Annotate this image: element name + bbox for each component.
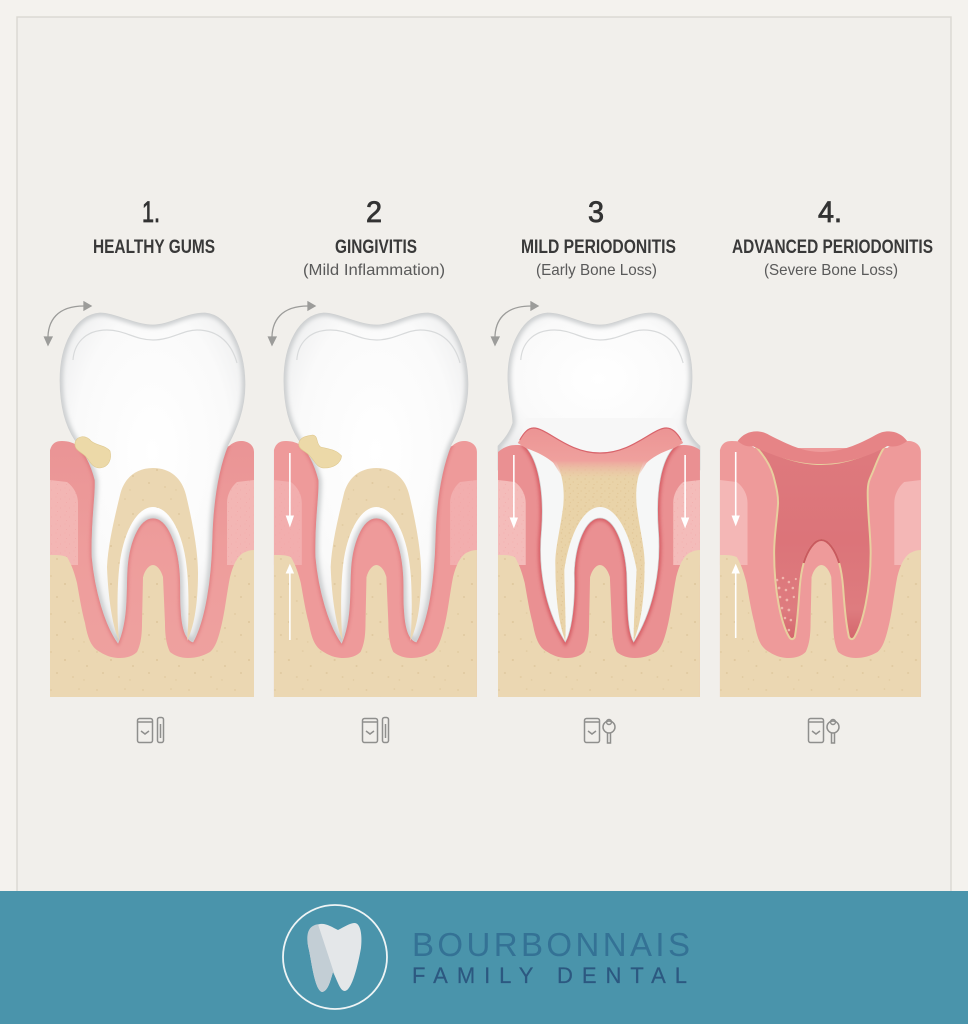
panel: stage 4 advanced periodontitis (720, 196, 933, 743)
icon: rotation arrow (492, 302, 538, 345)
logo wordmark: FAMILY DENTAL (412, 963, 687, 988)
arrow: recession down (732, 452, 739, 525)
arrow: recession down (286, 453, 293, 526)
illustration: gingivitis tooth and gums (274, 313, 477, 697)
panel: stage 1 healthy gums (44, 196, 254, 742)
heading: stage 1: 1. (142, 196, 160, 229)
logo wordmark: BOURBONNAIS (412, 926, 690, 963)
heading: stage 2: (Mild Inflammation) (303, 262, 445, 279)
heading: stage 3: 3 (588, 196, 604, 229)
crumbling bone patch (776, 577, 797, 631)
icon: phone and probe (584, 718, 615, 743)
arrow: bone loss up (732, 565, 739, 638)
heading: stage 1: HEALTHY GUMS (93, 237, 215, 258)
illustration: mild periodontitis tooth and gums (498, 313, 700, 697)
logo badge (283, 905, 387, 1009)
illustration: advanced periodontitis socket and gums (720, 431, 921, 697)
icon: rotation arrow (268, 302, 315, 345)
icon: phone and brush (138, 718, 164, 742)
arrow: bone loss up (286, 565, 293, 640)
heading: stage 2 (303, 196, 445, 279)
icon: phone and brush (362, 718, 388, 742)
heading: stage 3 (521, 196, 676, 279)
illustration: healthy tooth and gums (50, 313, 254, 697)
heading: stage 4: (Severe Bone Loss) (764, 262, 898, 279)
arrow: recession left (510, 455, 517, 527)
plaque deposit (75, 437, 111, 468)
heading: stage 4 (732, 196, 933, 279)
footer band (0, 891, 968, 1024)
heading: stage 3: MILD PERIODONITIS (521, 237, 676, 258)
upper gum lip (738, 431, 907, 464)
heading: stage 4: 4. (818, 196, 842, 229)
crown base overlay (520, 418, 681, 453)
gum collar (518, 428, 683, 482)
icon: rotation arrow (44, 302, 91, 345)
heading: stage 2: GINGIVITIS (335, 237, 417, 258)
panel: stage 3 mild periodontitis (492, 196, 700, 743)
heading: stage 3: (Early Bone Loss) (536, 262, 657, 279)
logo wordmark (412, 926, 690, 988)
plaque deposit (299, 435, 342, 468)
arrow: recession right (682, 455, 689, 527)
heading: stage 2: 2 (366, 196, 382, 229)
heading: stage 1 (93, 196, 215, 258)
icon: phone and probe (808, 718, 839, 743)
panel: stage 2 gingivitis (268, 196, 477, 742)
